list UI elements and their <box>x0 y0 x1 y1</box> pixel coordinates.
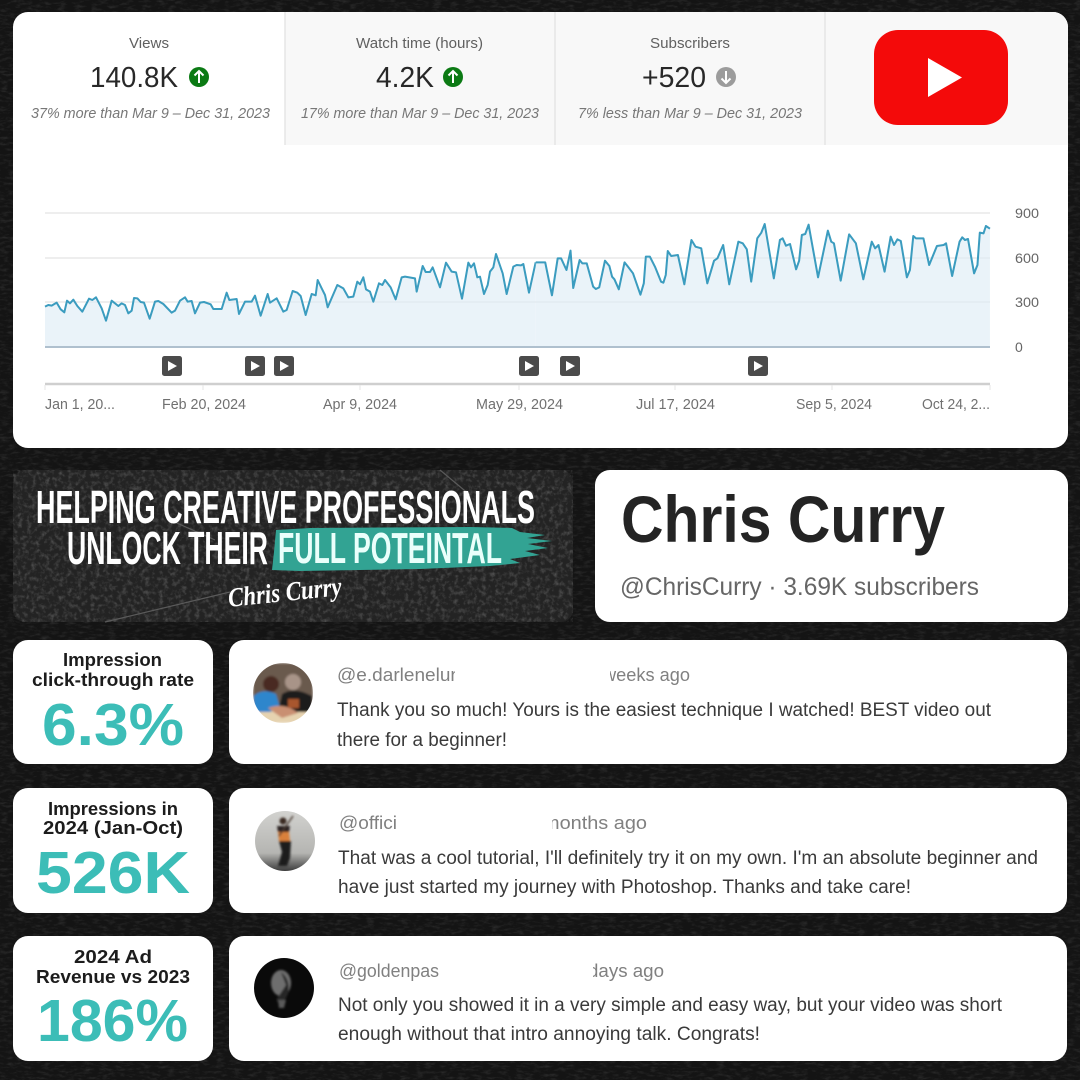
x axis with dates: Oct 24, 2... <box>922 397 990 413</box>
metric: subscribers: 7% less than Mar 9 – Dec 31, 2023 <box>578 105 803 122</box>
x axis with dates: Jul 17, 2024 <box>636 397 715 413</box>
panel: channel name <box>595 470 1068 622</box>
stat card: impressions: 2024 (Jan-Oct) <box>43 818 183 838</box>
x axis with dates: Jan 1, 20... <box>45 397 115 413</box>
metric: watch time: 17% more than Mar 9 – Dec 31, 2023 <box>301 105 540 122</box>
stat card: ad revenue: 2024 Ad <box>74 947 152 967</box>
y axis labels <box>1015 205 1039 355</box>
x axis with dates <box>45 384 990 413</box>
x axis with dates: Apr 9, 2024 <box>323 397 397 413</box>
stat card: ad revenue <box>13 936 213 1061</box>
inactive tabs background <box>285 12 1068 145</box>
banner: tagline: HELPING CREATIVE PROFESSIONALS <box>36 481 535 533</box>
comment card 2: months ago <box>543 812 647 833</box>
panel: channel name: Chris Curry <box>621 482 945 556</box>
banner: tagline: Chris Curry <box>226 571 344 613</box>
comment card 1 <box>229 640 1067 764</box>
y axis labels: 0 <box>1015 339 1023 355</box>
comment card 1: Thank you so much! Yours is the easiest technique I watched! BEST video out <box>337 700 992 721</box>
comment card 2: have just started my journey with Photoshop. Thanks and take care! <box>338 877 911 898</box>
stat card: click-through rate: click-through rate <box>32 670 194 690</box>
stat card: click-through rate: 6.3% <box>42 692 184 758</box>
metric: subscribers: Subscribers <box>650 36 730 52</box>
line chart: daily views <box>45 213 990 347</box>
x axis with dates: May 29, 2024 <box>476 397 563 413</box>
metric: views: 140.8K <box>90 62 179 94</box>
avatar: dark portrait <box>254 958 314 1018</box>
metric: watch time <box>301 36 540 122</box>
comment card 1: @e.darlenelun <box>337 664 461 685</box>
panel: YouTube analytics <box>13 12 1068 448</box>
x axis with dates: Feb 20, 2024 <box>162 397 246 413</box>
stat card: impressions: Impressions in <box>48 799 178 819</box>
metric: subscribers: +520 <box>642 62 706 94</box>
metric: views: Views <box>129 36 169 52</box>
comment card 2 <box>229 788 1067 913</box>
comment card 2: @offici <box>339 812 397 833</box>
metric: watch time: Watch time (hours) <box>356 36 483 52</box>
panel: channel name: @ChrisCurry · 3.69K subscribers <box>620 573 979 601</box>
banner: tagline <box>13 470 573 622</box>
comment card 3: enough without that intro annoying talk. Congrats! <box>338 1024 760 1045</box>
stat card: ad revenue: Revenue vs 2023 <box>36 967 190 987</box>
stat card: click-through rate: Impression <box>63 650 162 670</box>
brush stroke highlight <box>272 527 552 571</box>
metric: views <box>31 36 271 122</box>
comment card 3: Not only you showed it in a very simple and easy way, but your video was short <box>338 995 1003 1016</box>
comment card 1: there for a beginner! <box>337 730 507 751</box>
avatar: family photo <box>253 663 313 723</box>
comment card 3: @goldenpas <box>339 960 439 981</box>
banner: tagline: UNLOCK THEIR <box>67 522 268 574</box>
banner: tagline: FULL POTEINTAL <box>278 524 502 573</box>
comment card 3: days ago <box>588 960 664 981</box>
metric: views: 37% more than Mar 9 – Dec 31, 2023 <box>31 105 271 122</box>
y axis labels: 900 <box>1015 205 1039 221</box>
y axis labels: 600 <box>1015 250 1039 266</box>
stat card: ad revenue: 186% <box>37 988 188 1054</box>
metric: subscribers <box>578 36 803 122</box>
x axis with dates: Sep 5, 2024 <box>796 397 872 413</box>
y axis labels: 300 <box>1015 294 1039 310</box>
comment card 1: weeks ago <box>602 664 690 685</box>
stat card: impressions <box>13 788 213 913</box>
comment card 2: That was a cool tutorial, I'll definitely try it on my own. I'm an absolute beginner and <box>338 848 1038 869</box>
comment card 3 <box>229 936 1067 1061</box>
stat card: impressions: 526K <box>36 840 190 906</box>
video publish markers <box>162 356 768 376</box>
metric: watch time: 4.2K <box>376 62 435 94</box>
avatar: person with guitar <box>255 811 315 871</box>
icon: YouTube logo <box>874 30 1008 125</box>
stat card: click-through rate <box>13 640 213 764</box>
